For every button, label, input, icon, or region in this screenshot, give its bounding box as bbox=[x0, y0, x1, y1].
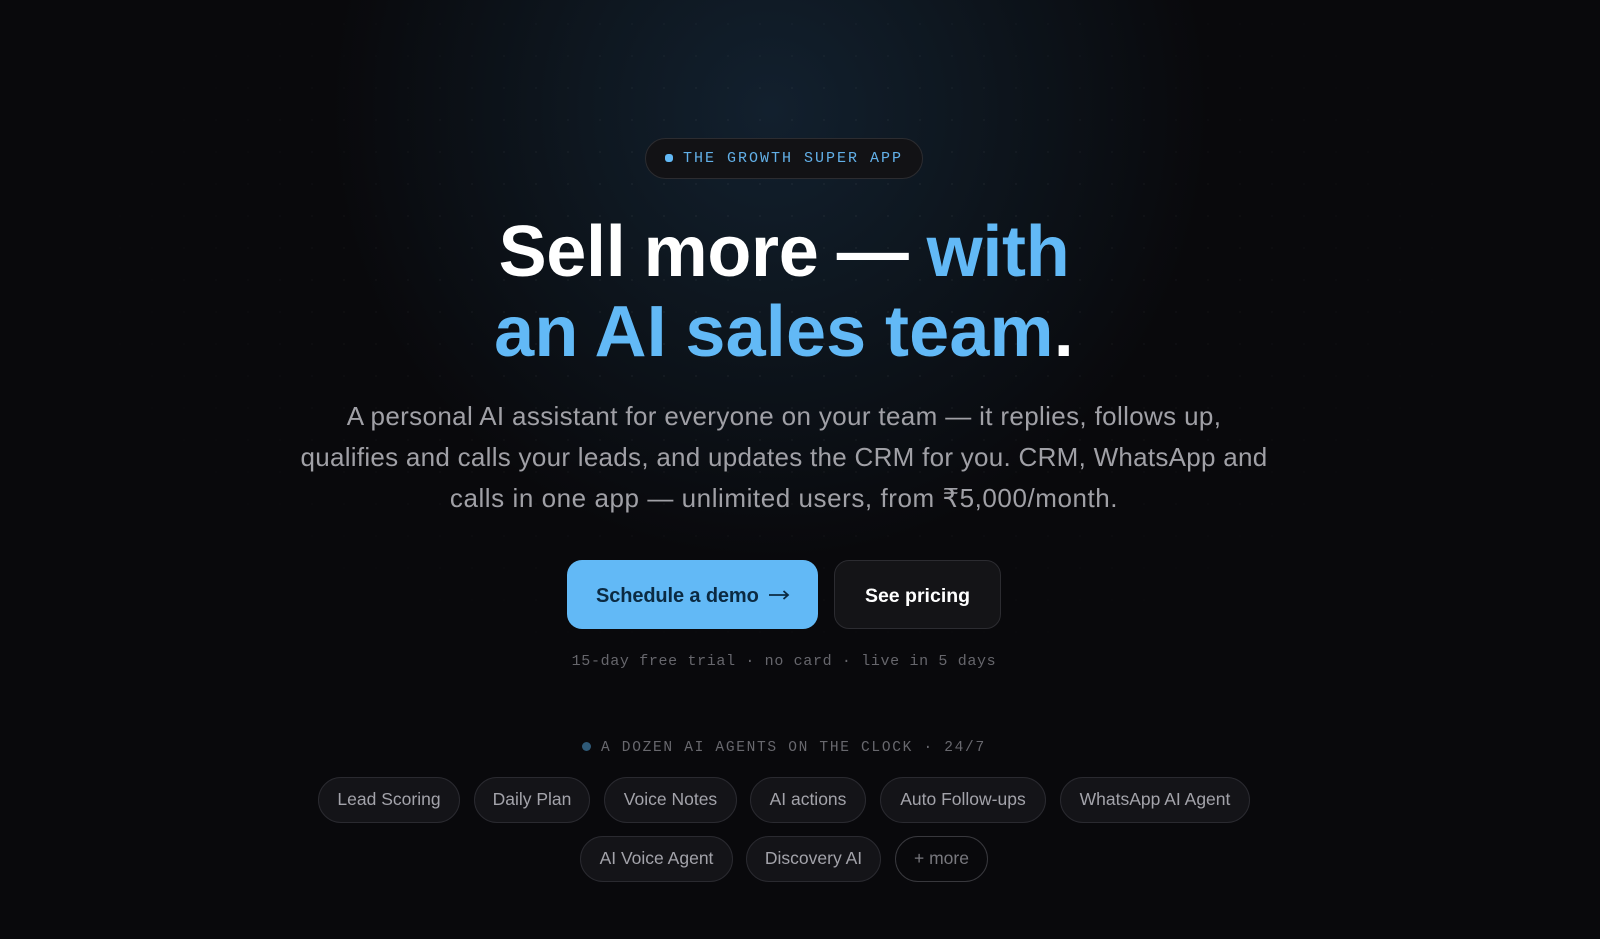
chips bbox=[318, 777, 1250, 882]
subheading line 2: qualifies and calls your leads, and updates the CRM for you. CRM, WhatsApp and bbox=[300, 442, 1268, 472]
chip: more: + more bbox=[914, 848, 969, 868]
chip: Discovery AI: Discovery AI bbox=[765, 848, 862, 868]
agents dot bbox=[582, 742, 591, 751]
subheading line 1: A personal AI assistant for everyone on your team — it replies, follows up, bbox=[347, 401, 1221, 431]
chip: Lead Scoring: Lead Scoring bbox=[337, 789, 441, 809]
primary button bbox=[567, 560, 818, 629]
secondary button bbox=[834, 560, 1001, 629]
chip: Daily Plan bbox=[474, 777, 590, 823]
trial note: 15-day free trial · no card · live in 5 days bbox=[572, 653, 996, 670]
badge text: THE GROWTH SUPER APP bbox=[683, 150, 903, 167]
chip: WhatsApp AI Agent bbox=[1060, 777, 1250, 823]
chip: AI Voice Agent: AI Voice Agent bbox=[600, 848, 713, 868]
chip: Voice Notes: Voice Notes bbox=[624, 789, 717, 809]
badge dot bbox=[665, 154, 673, 162]
headline line 2: an AI sales team. bbox=[494, 292, 1074, 372]
secondary button: See pricing bbox=[865, 585, 970, 607]
chip: Auto Follow-ups: Auto Follow-ups bbox=[900, 789, 1026, 809]
chip: Discovery AI bbox=[746, 836, 881, 882]
chip: Lead Scoring bbox=[318, 777, 460, 823]
headline bbox=[494, 212, 1074, 372]
chip: AI actions: AI actions bbox=[770, 789, 846, 809]
headline line 1: Sell more — with bbox=[499, 212, 1069, 292]
subheading line 3: calls in one app — unlimited users, from ₹5,000/month. bbox=[450, 483, 1118, 513]
primary button label: Schedule a demo bbox=[596, 585, 759, 607]
chip: more bbox=[895, 836, 988, 882]
chip: AI Voice Agent bbox=[580, 836, 733, 882]
chip: Voice Notes bbox=[604, 777, 737, 823]
chip: Auto Follow-ups bbox=[880, 777, 1046, 823]
subheading bbox=[300, 401, 1268, 513]
agents label bbox=[582, 740, 986, 756]
chip: Daily Plan: Daily Plan bbox=[493, 789, 571, 809]
agents text: A DOZEN AI AGENTS ON THE CLOCK · 24/7 bbox=[601, 740, 986, 756]
eyebrow badge bbox=[645, 138, 923, 179]
chip: WhatsApp AI Agent: WhatsApp AI Agent bbox=[1080, 789, 1230, 809]
chip: AI actions bbox=[750, 777, 866, 823]
dot grid background bbox=[535, 152, 1017, 409]
icon: arrow bbox=[769, 590, 790, 600]
